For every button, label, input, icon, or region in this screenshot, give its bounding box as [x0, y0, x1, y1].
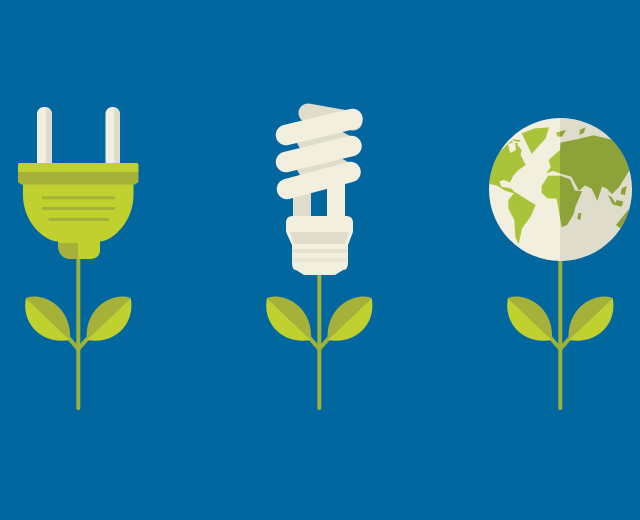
icon: compact fluorescent bulb: [286, 113, 353, 275]
icon: electric plug: [18, 107, 138, 259]
icon: world globe: [487, 118, 632, 261]
continents: [487, 127, 630, 244]
plant stem and leaves: globe: [507, 259, 613, 408]
illustration: three plants growing a plug, a bulb and a globe: [18, 104, 632, 410]
plant stem and leaves: bulb: [266, 259, 372, 408]
plant stem and leaves: plug: [25, 259, 131, 408]
